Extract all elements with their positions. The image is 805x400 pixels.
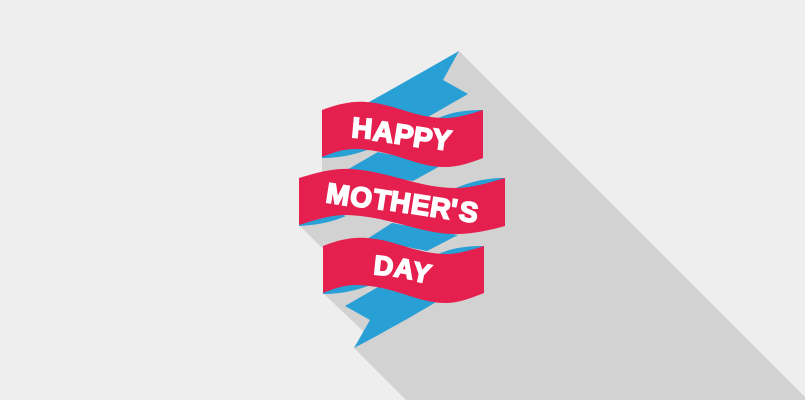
fold: top banner right [434, 110, 483, 125]
fold: middle banner right [456, 178, 505, 195]
blue ribbon bottom tail [345, 287, 438, 348]
fold: bottom banner right [434, 246, 484, 262]
fold: bottom banner left [323, 276, 376, 294]
blue ribbon middle section two [367, 223, 458, 251]
blue ribbon: behind banners [299, 51, 505, 348]
long diagonal shadow [299, 51, 805, 400]
fold: middle banner left [299, 205, 346, 226]
text: MOTHER'S: MOTHER'S [324, 177, 480, 229]
blue ribbon top tail [362, 51, 468, 117]
blue ribbon middle section one [345, 152, 442, 181]
banner: MOTHER'S [299, 169, 505, 234]
text: DAY: DAY [372, 250, 434, 290]
fold: top banner left [322, 140, 375, 158]
banner: HAPPY [322, 102, 483, 167]
banner: DAY [323, 238, 484, 303]
text: HAPPY: HAPPY [350, 112, 453, 158]
